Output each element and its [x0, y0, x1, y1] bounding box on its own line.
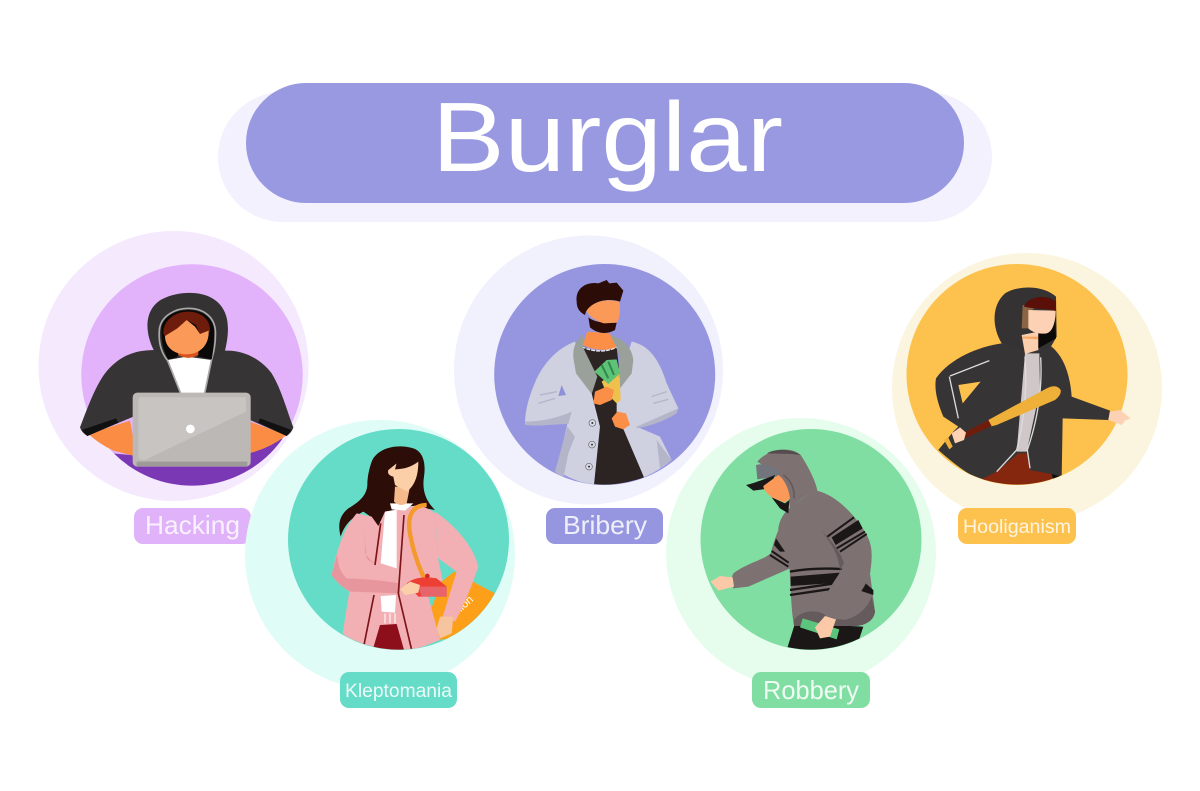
figure: woman stealing wallet [332, 446, 495, 653]
laptop [133, 393, 251, 467]
figure: hooded robber [711, 450, 875, 653]
panel: kleptomania [245, 420, 515, 708]
label: Hooliganism: Hooliganism [963, 517, 1071, 538]
figure: man taking bribe [525, 280, 678, 485]
label: Hooliganism [958, 508, 1076, 544]
label: Bribery: Bribery [563, 510, 647, 540]
panel: hacking [38, 231, 308, 544]
label: Bribery [546, 508, 663, 544]
panel: hooliganism [892, 253, 1162, 544]
cash envelope [593, 359, 630, 429]
red wallet [400, 574, 447, 597]
title banner [218, 82, 992, 222]
shoulder bag [427, 572, 495, 640]
label: Kleptomania [340, 672, 457, 708]
label: Hacking: Hacking [145, 510, 240, 540]
panel: robbery [666, 418, 936, 708]
head [577, 280, 623, 333]
figure: hacker with laptop [80, 293, 297, 497]
figure: hooligan with bat [935, 287, 1131, 487]
label: Hacking [134, 508, 251, 544]
label: Robbery: Robbery [763, 675, 859, 705]
baseball bat [944, 386, 1061, 449]
title: Burglar [432, 82, 783, 192]
shoulder bag: Fashion [438, 594, 476, 630]
label: Robbery [752, 672, 870, 708]
panel: bribery [454, 236, 723, 544]
infographic canvas [38, 83, 1162, 708]
label: Kleptomania: Kleptomania [345, 681, 452, 702]
